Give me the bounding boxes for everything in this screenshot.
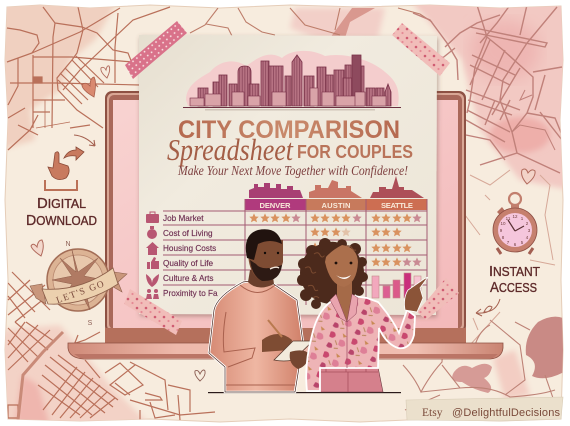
shirt xyxy=(306,295,415,391)
title: FOR COUPLES xyxy=(297,142,413,162)
etsy badge: Etsy xyxy=(422,407,443,419)
streets bottom left xyxy=(8,272,215,420)
row icons xyxy=(146,212,159,299)
title: Make Your Next Move Together with Confidence! xyxy=(177,163,408,178)
compass with ribbon: N xyxy=(65,241,71,248)
head xyxy=(248,240,283,281)
row labels: Job Market xyxy=(163,214,204,223)
star ratings xyxy=(249,213,422,266)
title: CITY COMPARISON xyxy=(178,116,400,144)
table grid xyxy=(163,199,427,305)
paper note card xyxy=(139,35,437,315)
alarm clock icon: 7 xyxy=(507,240,510,245)
alarm clock icon: 2 xyxy=(526,221,529,226)
instant access label: INSTANT xyxy=(489,263,540,280)
alarm clock icon: 9 xyxy=(500,228,503,233)
washi tape: top right xyxy=(392,23,450,76)
city skyline illustration xyxy=(183,51,401,110)
laptop xyxy=(68,91,503,361)
alarm clock icon: 11 xyxy=(506,216,511,221)
streets top centre xyxy=(190,8,432,36)
pointing hand xyxy=(404,277,428,312)
alarm clock icon: 10 xyxy=(500,221,506,226)
instant access label: ACCESS xyxy=(490,279,537,296)
heart doodle top left filled xyxy=(82,77,96,97)
curved arrow bottom right xyxy=(476,299,500,316)
alarm clock icon: 6 xyxy=(514,242,517,247)
table headers: AUSTIN xyxy=(322,201,350,210)
laptop screen xyxy=(105,91,466,333)
etsy badge: @DelightfulDecisions xyxy=(452,407,560,419)
digital download icon xyxy=(45,147,84,190)
compass with ribbon xyxy=(30,241,127,327)
couple illustration xyxy=(208,229,428,393)
heart doodle top left outline xyxy=(101,66,110,78)
washi tape: top left xyxy=(125,21,187,79)
compass with ribbon: LET'S GO xyxy=(55,280,106,306)
streets right margin xyxy=(465,170,555,345)
neck and face xyxy=(322,242,358,368)
hair xyxy=(297,238,368,309)
laptop base xyxy=(68,328,503,361)
ground line xyxy=(208,392,401,393)
streets top right xyxy=(413,5,562,173)
row labels: Quality of Life xyxy=(163,259,214,268)
arms and tablet xyxy=(262,334,292,352)
compass with ribbon: S xyxy=(88,320,93,327)
curved arrow top left xyxy=(74,135,95,146)
alarm clock icon: 4 xyxy=(526,235,529,240)
washi tape: bottom left xyxy=(124,289,182,335)
city mini skylines xyxy=(249,176,424,198)
table headers: SEATTLE xyxy=(381,201,413,210)
comparison table xyxy=(146,176,427,305)
heart doodle left xyxy=(31,240,43,256)
alarm clock icon: 5 xyxy=(521,240,524,245)
table headers xyxy=(245,199,427,210)
pants xyxy=(320,367,383,392)
row labels: Housing Costs xyxy=(163,244,216,253)
ribbon xyxy=(30,272,127,304)
row labels xyxy=(163,214,218,298)
row labels: Cost of Living xyxy=(163,229,213,238)
digital download label: DOWNLOAD xyxy=(26,212,97,229)
alarm clock icon: 12 xyxy=(512,214,518,219)
alarm clock icon: 8 xyxy=(502,235,505,240)
table headers: DENVER xyxy=(260,201,291,210)
alarm clock icon xyxy=(493,193,537,254)
instant access label xyxy=(489,263,540,296)
row labels: Culture & Arts xyxy=(163,274,214,283)
digital download label xyxy=(26,195,97,229)
title: Spreadsheet xyxy=(167,132,294,167)
bar chart xyxy=(372,273,421,298)
digital download label: DIGITAL xyxy=(37,195,86,212)
heart doodle bottom xyxy=(195,370,205,381)
title xyxy=(167,116,413,178)
streets bottom right xyxy=(403,320,555,410)
alarm clock icon: 3 xyxy=(528,228,531,233)
sweater xyxy=(209,280,303,392)
neck xyxy=(248,270,274,288)
hair xyxy=(246,229,282,260)
washi tape: bottom right xyxy=(417,278,459,320)
woman xyxy=(297,238,428,392)
streets top left xyxy=(7,7,170,150)
man xyxy=(209,229,313,392)
heart doodle right xyxy=(522,169,535,184)
alarm clock icon: 1 xyxy=(521,216,524,221)
row labels: Proximity to Fa xyxy=(163,289,218,298)
etsy badge xyxy=(406,397,563,421)
